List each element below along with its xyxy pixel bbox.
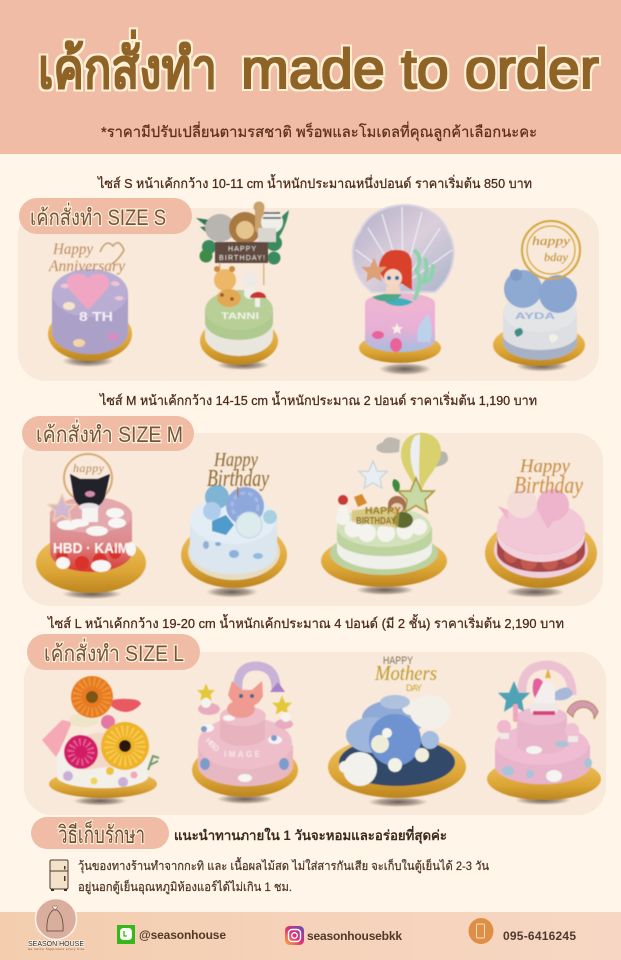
cake: jungle birthday [196, 202, 289, 370]
size M description: ไซส์ M หน้าเค้กกว้าง 14-15 cm น้ำหนักประมาณ 2 ปอนด์ ราคาเริ่มต้น 1,190 บาท [99, 391, 537, 408]
cake: blue rose: Birthday [207, 466, 269, 492]
panel: size M [22, 416, 603, 606]
cake: jungle birthday: HAPPY [228, 246, 256, 253]
cake: green balloon: BIRTHDAY [356, 516, 396, 527]
cake: lavender anniversary: Anniversary [48, 258, 126, 275]
logo: we serve happiness every bite [28, 947, 84, 951]
cake: mermaid shell [353, 205, 454, 375]
cake: pink peony strawberry: Happy [519, 456, 571, 477]
cake: gerbera flowers [42, 676, 159, 806]
cake: green balloon: HAPPY [365, 506, 401, 517]
logo: SEASON HOUSE [28, 939, 84, 948]
heading: size M: เค้กสั่งทำ SIZE M [36, 419, 183, 447]
cake: lavender anniversary [48, 241, 132, 367]
line contact [117, 925, 226, 944]
cake: kuromi strawberry: HBD · KAIM [53, 540, 129, 557]
cake: pink fox two tier: IMAGE [224, 750, 261, 759]
cake: kuromi strawberry: happy [73, 461, 105, 475]
cake: jungle birthday: TANNI [221, 311, 259, 321]
cake: lavender anniversary: Happy [52, 241, 94, 258]
cake: jungle birthday: BIRTHDAY! [219, 255, 265, 262]
phone contact: 095-6416245 [503, 929, 576, 943]
cake: pink peony strawberry [485, 456, 597, 598]
cake: blue hydrangea mothers day: DAY [406, 683, 422, 693]
panel: size L [24, 634, 606, 815]
footer [0, 898, 621, 960]
cake: blue hydrangea mothers day [328, 655, 466, 807]
cake: blue hydrangea mothers day: HAPPY [383, 655, 414, 667]
cake: kuromi strawberry [36, 454, 146, 599]
title [38, 30, 599, 100]
storage text: วุ้นของทางร้านทำจากกะทิ และ เนื้อผลไม้สด ไม่ใส่สารกันเสีย จะเก็บในตู้เย็นได้ 2-3 วัน [78, 857, 489, 874]
cake: blue rose [181, 449, 287, 598]
cake: blue bear [493, 221, 585, 372]
logo [28, 898, 84, 951]
phone contact [468, 918, 576, 944]
storage section [31, 817, 489, 895]
cake: blue bear: AYDA [515, 311, 556, 321]
cake: pink peony strawberry: Birthday [514, 473, 583, 499]
instagram contact [285, 926, 402, 945]
cake: pink fox two tier: HBD [204, 736, 221, 754]
storage text [78, 857, 489, 895]
price note: *ราคามีปรับเปลี่ยนตามรสชาติ พร็อพและโมเดลที่คุณลูกค้าเลือกนะคะ [101, 121, 537, 142]
heading: size L [27, 634, 200, 670]
cake: blue hydrangea mothers day: Mothers [374, 661, 437, 685]
cake: blue bear: happy [532, 233, 570, 248]
size S description: ไซส์ S หน้าเค้กกว้าง 10-11 cm น้ำหนักประมาณหนึ่งปอนด์ ราคาเริ่มต้น 850 บาท [97, 174, 532, 191]
cake: blue bear: bday [544, 250, 569, 264]
heading: size S [19, 198, 192, 234]
heading: size S: เค้กสั่งทำ SIZE S [30, 202, 166, 230]
cake: green balloon [321, 433, 448, 595]
heading: storage [31, 817, 169, 849]
panel: size S [18, 198, 599, 381]
cake: lavender anniversary: 8 TH [79, 309, 113, 324]
instagram contact: seasonhousebkk [307, 929, 402, 943]
line contact: @seasonhouse [139, 928, 226, 942]
header band [0, 0, 621, 154]
cake: blue rose: Happy [213, 449, 258, 471]
heading: size L: เค้กสั่งทำ SIZE L [44, 638, 184, 666]
heading: size M [22, 416, 194, 451]
title: made to order [241, 37, 599, 100]
title: เค้กสั่งทำ [38, 30, 217, 100]
storage text: อยู่นอกตู้เย็นอุณหภูมิห้องแอร์ได้ไม่เกิน 1 ชม. [78, 879, 292, 895]
size L description: ไซส์ L หน้าเค้กกว้าง 19-20 cm น้ำหนักเค้กประมาณ 4 ปอนด์ (มี 2 ชั้น) ราคาเริ่มต้น 2,190 บาท [47, 614, 564, 631]
cake: pink fox two tier [192, 666, 298, 804]
storage advice: แนะนำทานภายใน 1 วันจะหอมและอร่อยที่สุดค่ะ [174, 825, 447, 844]
heading: storage: วิธีเก็บรักษา [58, 820, 145, 849]
icon: fridge [50, 860, 68, 891]
cake: unicorn two tier [487, 665, 601, 805]
